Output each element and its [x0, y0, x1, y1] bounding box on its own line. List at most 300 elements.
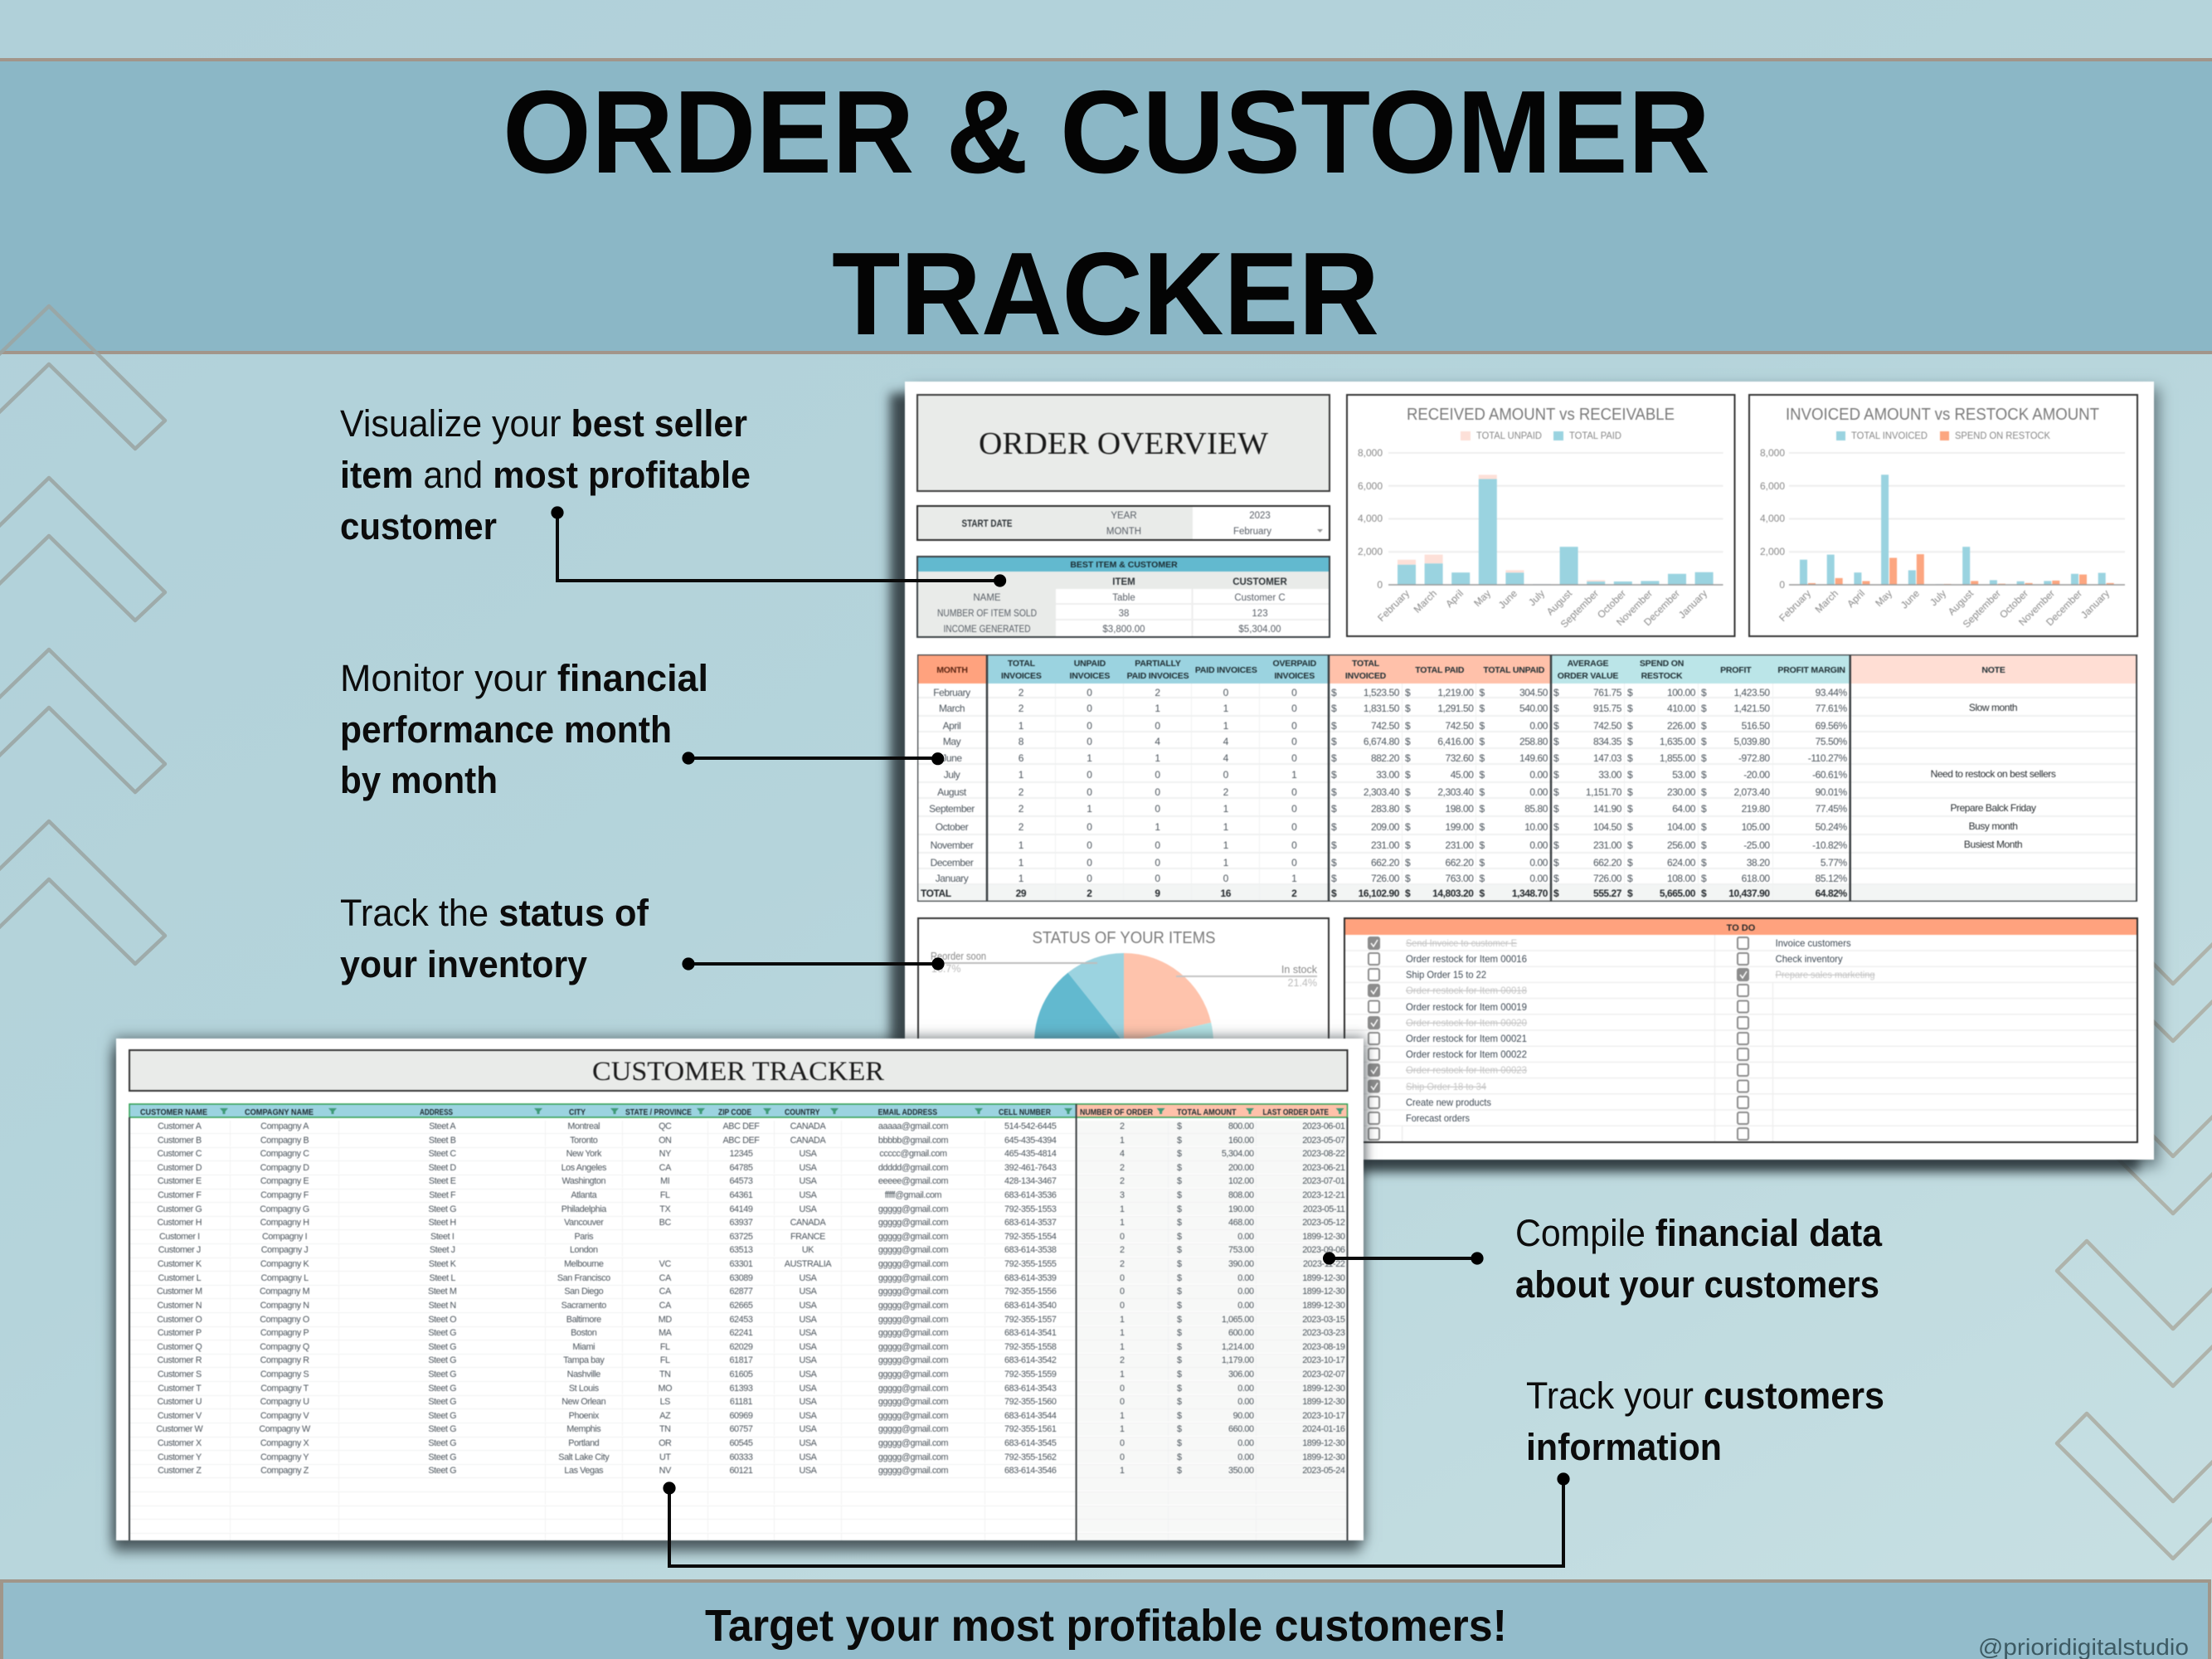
customer table rows: 60969: [729, 1411, 752, 1421]
table rows by month: $: [1553, 720, 1558, 732]
chart: received amount vs receivable: August: [1544, 587, 1575, 618]
table rows by month: October: [936, 821, 968, 833]
customer table rows: Customer T: [158, 1384, 201, 1394]
table rows by month: 1: [1223, 839, 1228, 851]
table rows by month: $: [1627, 857, 1632, 868]
heading: order overview: [917, 395, 1330, 491]
table rows by month: $: [1627, 873, 1632, 884]
table rows by month: $: [1405, 786, 1410, 798]
customer table rows: Compagny Q: [260, 1342, 309, 1352]
table rows by month: 1: [1291, 769, 1296, 781]
customer table rows: 0.00: [1237, 1273, 1254, 1283]
customer table rows: ddddd@gmail.com: [878, 1163, 948, 1173]
table rows by month: $: [1405, 839, 1410, 851]
customer table rows: Baltimore: [566, 1315, 601, 1325]
customer table rows: Steet N: [429, 1301, 456, 1311]
customer table rows: 683-614-3539: [1004, 1273, 1056, 1283]
customer table rows: Steet G: [428, 1355, 456, 1365]
table rows by month: 0: [1291, 786, 1296, 798]
table rows by month: July: [944, 769, 960, 781]
customer table rows: 60545: [729, 1438, 752, 1448]
table rows by month: 4: [1223, 736, 1228, 747]
customer table rows: 0: [1120, 1452, 1125, 1462]
customer table rows: Customer M: [157, 1287, 202, 1297]
customer table rows: ggggg@gmail.com: [878, 1411, 948, 1421]
customer table rows: 190.00: [1228, 1204, 1254, 1214]
customer table rows: Customer Z: [158, 1466, 202, 1476]
customer table rows: 792-355-1557: [1004, 1315, 1056, 1325]
customer table rows: Compagny K: [260, 1259, 309, 1269]
customer table rows: 4: [1120, 1149, 1125, 1159]
chart: status of your items pie: STATUS OF YOUR ITEMS: [1032, 929, 1216, 947]
customer table rows: 62453: [729, 1315, 752, 1325]
table header row: TOTAL PAID: [1415, 665, 1464, 675]
table header row: SPEND ON: [1640, 659, 1684, 669]
customer table rows: 392-461-7643: [1004, 1163, 1056, 1173]
customer table rows: 12345: [729, 1149, 752, 1159]
chart: received amount vs receivable: 0: [1377, 579, 1383, 591]
table rows by month: 1: [1155, 821, 1160, 833]
table rows by month: 0: [1155, 769, 1160, 781]
table rows by month: $: [1627, 720, 1632, 732]
table rows by month: 9: [1155, 888, 1160, 899]
table rows by month: June: [941, 752, 962, 764]
table rows by month: 258.80: [1519, 736, 1548, 747]
customer table rows: MA: [659, 1328, 671, 1338]
customer table rows: $: [1177, 1245, 1182, 1255]
table rows by month: 763.00: [1445, 873, 1473, 884]
customer table rows: $: [1177, 1301, 1182, 1311]
table rows by month: 1: [1223, 857, 1228, 868]
table rows by month: 0: [1291, 736, 1296, 747]
table rows by month: $: [1331, 873, 1336, 884]
customer table rows: 792-355-1555: [1004, 1259, 1056, 1269]
table rows by month: 108.00: [1667, 873, 1695, 884]
customer table rows: New Orlean: [562, 1397, 605, 1407]
table rows by month: Prepare Balck Friday: [1950, 802, 2036, 814]
table rows by month: 761.75: [1593, 687, 1621, 698]
customer table rows: VC: [659, 1259, 671, 1269]
table rows by month: 5.77%: [1821, 857, 1847, 868]
best item and customer table: BEST ITEM & CUSTOMER: [1070, 560, 1178, 570]
customer table rows: FL: [660, 1190, 670, 1200]
footer tagline: Target your most profitable customers!: [705, 1601, 1507, 1651]
customer table rows: 1,065.00: [1222, 1315, 1254, 1325]
table header row: AVERAGE: [1568, 659, 1608, 669]
customer table rows: Compagny W: [259, 1424, 310, 1434]
customer table rows: CANADA: [790, 1136, 825, 1146]
customer table rows: Compagny C: [260, 1149, 309, 1159]
table rows by month: $: [1479, 786, 1485, 798]
table rows by month: 2: [1018, 821, 1023, 833]
table rows by month: 1: [1291, 873, 1296, 884]
table rows by month: $: [1553, 821, 1558, 833]
table rows by month: $: [1627, 786, 1632, 798]
customer table rows: 1: [1120, 1328, 1125, 1338]
customer table rows: San Francisco: [557, 1273, 610, 1283]
chart: invoiced amount vs restock amount: October: [1997, 587, 2030, 620]
table rows by month: $: [1553, 786, 1558, 798]
table rows by month: $: [1479, 873, 1485, 884]
customer table rows: 683-614-3537: [1004, 1218, 1056, 1228]
chart: invoiced amount vs restock amount: January: [2078, 587, 2112, 620]
customer table rows: CANADA: [790, 1121, 825, 1131]
table rows by month: 69.56%: [1816, 720, 1847, 732]
table rows by month: Need to restock on best sellers: [1931, 768, 2055, 780]
customer table rows: CA: [659, 1273, 671, 1283]
customer table rows: $: [1177, 1176, 1182, 1186]
table rows by month: 93.44%: [1816, 687, 1847, 698]
customer table rows: Customer C: [158, 1149, 202, 1159]
customer table rows: 792-355-1556: [1004, 1287, 1056, 1297]
customer table rows: Compagny T: [260, 1384, 309, 1394]
customer table rows: USA: [799, 1315, 816, 1325]
customer table rows: 2: [1120, 1245, 1125, 1255]
chart: received amount vs receivable: RECEIVED AMOUNT vs RECEIVABLE: [1407, 406, 1675, 424]
table rows by month: November: [931, 839, 973, 851]
customer table header: COMPAGNY NAME: [245, 1107, 314, 1117]
chart: received amount vs receivable: February: [1375, 587, 1412, 624]
table rows by month: 77.61%: [1816, 703, 1847, 714]
customer table rows: USA: [799, 1411, 816, 1421]
customer table rows: USA: [799, 1342, 816, 1352]
table rows by month: 1: [1223, 821, 1228, 833]
table rows by month: 50.24%: [1816, 821, 1847, 833]
customer table rows: Steet A: [429, 1121, 455, 1131]
table rows by month: -25.00: [1743, 839, 1770, 851]
callout: inventory status: [340, 892, 945, 985]
customer table rows: 683-614-3543: [1004, 1384, 1056, 1394]
customer table rows: Steet G: [428, 1384, 456, 1394]
table rows by month: 0.00: [1529, 839, 1548, 851]
customer table rows: Boston: [571, 1328, 596, 1338]
to do list: Invoice customers: [1776, 937, 1851, 949]
customer table rows: USA: [799, 1384, 816, 1394]
customer table rows: 792-355-1562: [1004, 1452, 1056, 1462]
table rows by month: 0.00: [1529, 769, 1548, 781]
table rows by month: 0: [1291, 857, 1296, 868]
table rows by month: 0: [1087, 821, 1091, 833]
customer table rows: 1: [1120, 1342, 1125, 1352]
table rows by month: $: [1405, 736, 1410, 747]
table rows by month: December: [931, 857, 973, 868]
customer table rows: New York: [566, 1149, 601, 1159]
table rows by month: 1: [1223, 720, 1228, 732]
customer table rows: 0: [1120, 1273, 1125, 1283]
customer table rows: Compagny Z: [260, 1466, 309, 1476]
table rows by month: -972.80: [1738, 752, 1770, 764]
customer table rows: $: [1177, 1204, 1182, 1214]
customer table rows: Compagny U: [260, 1397, 309, 1407]
table rows by month: 0.00: [1529, 857, 1548, 868]
customer table header: [129, 1104, 1347, 1117]
table rows by month: 147.03: [1593, 752, 1621, 764]
table rows by month: 6: [1018, 752, 1023, 764]
customer table rows: 2023-06-21: [1302, 1163, 1344, 1173]
table rows by month: 1,151.70: [1586, 786, 1621, 798]
customer table rows: Compagny L: [260, 1273, 309, 1283]
customer table rows: $: [1177, 1438, 1182, 1448]
customer table rows: 660.00: [1228, 1424, 1254, 1434]
customer table rows: 64361: [729, 1190, 752, 1200]
callout: best seller: Visualize your best seller: [340, 402, 747, 445]
to do list: Prepare sales marketing: [1776, 969, 1875, 980]
customer table rows: $: [1177, 1163, 1182, 1173]
customer table rows: Compagny H: [260, 1218, 309, 1228]
customer table rows: 2023-05-07: [1302, 1136, 1344, 1146]
customer table rows: 0.00: [1237, 1384, 1254, 1394]
customer table rows: Compagny V: [260, 1411, 309, 1421]
customer table rows: ggggg@gmail.com: [878, 1342, 948, 1352]
table rows by month: 209.00: [1371, 821, 1399, 833]
table rows by month: 1,635.00: [1660, 736, 1695, 747]
customer table rows: ABC DEF: [722, 1136, 759, 1146]
customer table rows: 350.00: [1228, 1466, 1254, 1476]
customer table rows: 2023-05-24: [1302, 1466, 1344, 1476]
table rows by month: $: [1331, 888, 1336, 899]
customer table rows: 160.00: [1228, 1136, 1254, 1146]
customer table rows: $: [1177, 1149, 1182, 1159]
to do list: Forecast orders: [1406, 1112, 1470, 1124]
to do list: Order restock for Item 00019: [1406, 1001, 1527, 1013]
customer table rows: 1899-12-30: [1302, 1397, 1344, 1407]
best item and customer table: Table: [1112, 593, 1135, 603]
customer table rows: UK: [802, 1245, 814, 1255]
customer table rows: ggggg@gmail.com: [878, 1287, 948, 1297]
customer table rows: Portland: [568, 1438, 599, 1448]
table rows by month: -110.27%: [1808, 752, 1847, 764]
customer table rows: Compagny N: [260, 1301, 309, 1311]
table rows by month: March: [939, 703, 965, 714]
table rows by month: 4: [1223, 752, 1228, 764]
table rows by month: $: [1627, 803, 1632, 815]
customer table rows: Compagny E: [260, 1176, 309, 1186]
callout: best seller: customer: [340, 505, 497, 547]
customer table rows: Washington: [562, 1176, 605, 1186]
chart: received amount vs receivable: May: [1471, 587, 1493, 609]
heading: customer tracker: CUSTOMER TRACKER: [592, 1057, 884, 1087]
table rows by month: $: [1553, 888, 1558, 899]
table rows by month: $: [1701, 786, 1706, 798]
customer table rows: USA: [799, 1370, 816, 1379]
customer table rows: 683-614-3540: [1004, 1301, 1056, 1311]
customer table rows: Compagny D: [260, 1163, 309, 1173]
table rows by month: 33.00: [1376, 769, 1399, 781]
customer table rows: 465-435-4814: [1004, 1149, 1056, 1159]
panel: order overview sheet: [905, 382, 2154, 1160]
table rows by month: $: [1331, 687, 1336, 698]
customer table rows: $: [1177, 1273, 1182, 1283]
table header row: INVOICES: [1001, 671, 1042, 681]
table rows by month: 75.50%: [1816, 736, 1847, 747]
customer table rows: USA: [799, 1466, 816, 1476]
customer table rows: Vancouver: [564, 1218, 603, 1228]
customer table rows: Customer L: [158, 1273, 201, 1283]
customer table rows: MO: [658, 1384, 672, 1394]
customer table header: NUMBER OF ORDER: [1080, 1107, 1153, 1117]
customer table rows: ggggg@gmail.com: [878, 1232, 948, 1242]
callout: inventory status: Track the status of: [340, 892, 649, 934]
customer table rows: Steet E: [429, 1176, 456, 1186]
customer table rows: 753.00: [1228, 1245, 1254, 1255]
table rows by month: $: [1553, 857, 1558, 868]
callout: customer information: Track your customers: [1526, 1374, 1884, 1417]
customer table rows: USA: [799, 1397, 816, 1407]
customer table rows: $: [1177, 1232, 1182, 1242]
chart: received amount vs receivable: TOTAL UNPAID: [1476, 431, 1542, 441]
table header row: MONTH: [936, 665, 968, 675]
customer table header: CELL NUMBER: [999, 1107, 1051, 1117]
start date selector: YEAR: [1111, 511, 1137, 521]
customer table rows: ggggg@gmail.com: [878, 1397, 948, 1407]
table rows by month: $: [1405, 821, 1410, 833]
table rows by month: $: [1553, 839, 1558, 851]
table rows by month: $: [1701, 839, 1706, 851]
customer table rows: bbbbb@gmail.com: [878, 1136, 948, 1146]
customer table rows: Los Angeles: [562, 1163, 606, 1173]
customer table rows: 1: [1120, 1218, 1125, 1228]
customer table rows: Customer J: [158, 1245, 201, 1255]
table rows by month: -60.61%: [1812, 769, 1847, 781]
table rows by month: $: [1701, 736, 1706, 747]
customer table rows: Customer B: [158, 1136, 202, 1146]
to do list: Check inventory: [1776, 953, 1843, 965]
table rows by month: $: [1553, 687, 1558, 698]
customer table rows: $: [1177, 1121, 1182, 1131]
table rows by month: 0: [1291, 839, 1296, 851]
to do list: Order restock for Item 00021: [1406, 1033, 1527, 1044]
table rows by month: 2: [1018, 703, 1023, 714]
customer table rows: OR: [659, 1438, 671, 1448]
table header row: TOTAL: [1008, 659, 1035, 669]
table rows by month: 742.50: [1371, 720, 1399, 732]
table header row: PAID INVOICES: [1127, 671, 1189, 681]
table rows by month: 2: [1155, 687, 1160, 698]
table rows by month: 0.00: [1529, 786, 1548, 798]
chart: received amount vs receivable: TOTAL PAID: [1569, 431, 1621, 441]
customer table rows: LS: [660, 1397, 670, 1407]
customer table rows: Compagny J: [261, 1245, 308, 1255]
table rows by month: 85.80: [1524, 803, 1548, 815]
customer table rows: Atlanta: [571, 1190, 596, 1200]
callout: best seller: [340, 402, 1006, 587]
customer table rows: Steet G: [428, 1328, 456, 1338]
customer table rows: NY: [659, 1149, 671, 1159]
table rows by month: 726.00: [1371, 873, 1399, 884]
customer table rows: USA: [799, 1204, 816, 1214]
table rows by month: 0.00: [1529, 720, 1548, 732]
table rows by month: 2,073.40: [1733, 786, 1770, 798]
customer table rows: 2: [1120, 1176, 1125, 1186]
chart: status of your items pie: [918, 918, 1329, 1151]
customer table rows: CA: [659, 1287, 671, 1297]
customer table rows: Steet M: [428, 1287, 456, 1297]
customer table rows: Toronto: [570, 1136, 597, 1146]
monthly financial table: [916, 654, 2138, 902]
best item and customer table: ITEM: [1112, 577, 1135, 587]
table rows by month: 0: [1087, 873, 1091, 884]
table rows by month: 4: [1155, 736, 1160, 747]
table rows by month: 38.20: [1747, 857, 1770, 868]
heading: order overview: ORDER OVERVIEW: [979, 426, 1268, 461]
table rows by month: 283.80: [1371, 803, 1399, 815]
chart: status of your items pie: 10.7%: [931, 963, 960, 975]
table rows by month: $: [1405, 703, 1410, 714]
table header row: PAID INVOICES: [1195, 665, 1257, 675]
customer table header: STATE / PROVINCE: [625, 1107, 692, 1117]
table rows by month: $: [1405, 720, 1410, 732]
customer table rows: Customer F: [158, 1190, 202, 1200]
customer table rows: USA: [799, 1190, 816, 1200]
to do list: Order restock for Item 00023: [1406, 1064, 1527, 1076]
customer table rows: $: [1177, 1342, 1182, 1352]
customer table rows: AZ: [659, 1411, 670, 1421]
to do list: Ship Order 15 to 22: [1406, 969, 1486, 980]
table rows by month: $: [1331, 736, 1336, 747]
customer table rows: ggggg@gmail.com: [878, 1204, 948, 1214]
table rows by month: 6,674.80: [1364, 736, 1399, 747]
customer table rows: 683-614-3538: [1004, 1245, 1056, 1255]
customer table rows: Steet F: [429, 1190, 455, 1200]
customer table rows: [131, 1121, 1347, 1540]
customer table rows: 61605: [729, 1370, 752, 1379]
table rows by month: $: [1553, 736, 1558, 747]
table rows by month: 1: [1223, 703, 1228, 714]
chart: invoiced amount vs restock amount: September: [1961, 587, 2003, 630]
chart: invoiced amount vs restock amount: February: [1777, 587, 1813, 624]
customer table rows: Customer O: [157, 1315, 202, 1325]
table rows by month: 0: [1087, 703, 1091, 714]
table rows by month: 8: [1018, 736, 1023, 747]
customer table rows: $: [1177, 1328, 1182, 1338]
table rows by month: 2: [1018, 786, 1023, 798]
customer table rows: aaaaa@gmail.com: [878, 1121, 948, 1131]
table header row: PARTIALLY: [1135, 659, 1181, 669]
customer table rows: 683-614-3546: [1004, 1466, 1056, 1476]
customer table rows: USA: [799, 1149, 816, 1159]
to do list: Create new products: [1406, 1097, 1491, 1108]
customer table rows: Salt Lake City: [558, 1452, 609, 1462]
table rows by month: $: [1701, 703, 1706, 714]
chart: invoiced amount vs restock amount: 2,000: [1760, 546, 1785, 557]
best item and customer table: 123: [1252, 609, 1268, 619]
table rows by month: $: [1331, 752, 1336, 764]
customer table rows: 1: [1120, 1466, 1125, 1476]
customer table rows: 0: [1120, 1384, 1125, 1394]
table rows by month: $: [1479, 687, 1485, 698]
to do list: Order restock for Item 00020: [1406, 1017, 1527, 1029]
customer table rows: 792-355-1559: [1004, 1370, 1056, 1379]
customer table rows: 306.00: [1228, 1370, 1254, 1379]
chart: invoiced amount vs restock amount: 0: [1779, 579, 1785, 591]
table rows by month: Slow month: [1969, 702, 2017, 713]
table rows by month: 45.00: [1451, 769, 1473, 781]
customer table rows: 200.00: [1228, 1163, 1254, 1173]
table rows by month: 1,421.50: [1733, 703, 1770, 714]
table header row: PROFIT: [1720, 665, 1751, 675]
customer table rows: Customer X: [158, 1438, 202, 1448]
table rows by month: 231.00: [1445, 839, 1473, 851]
chart: invoiced amount vs restock amount: November: [2016, 587, 2057, 628]
table rows by month: August: [937, 786, 966, 798]
table rows by month: 624.00: [1667, 857, 1695, 868]
customer table rows: MD: [659, 1315, 672, 1325]
table rows by month: 6,416.00: [1437, 736, 1473, 747]
table rows by month: 1: [1018, 769, 1023, 781]
table rows by month: 77.45%: [1816, 803, 1847, 815]
customer table rows: $: [1177, 1259, 1182, 1269]
chart: invoiced amount vs restock amount: August: [1946, 587, 1976, 618]
